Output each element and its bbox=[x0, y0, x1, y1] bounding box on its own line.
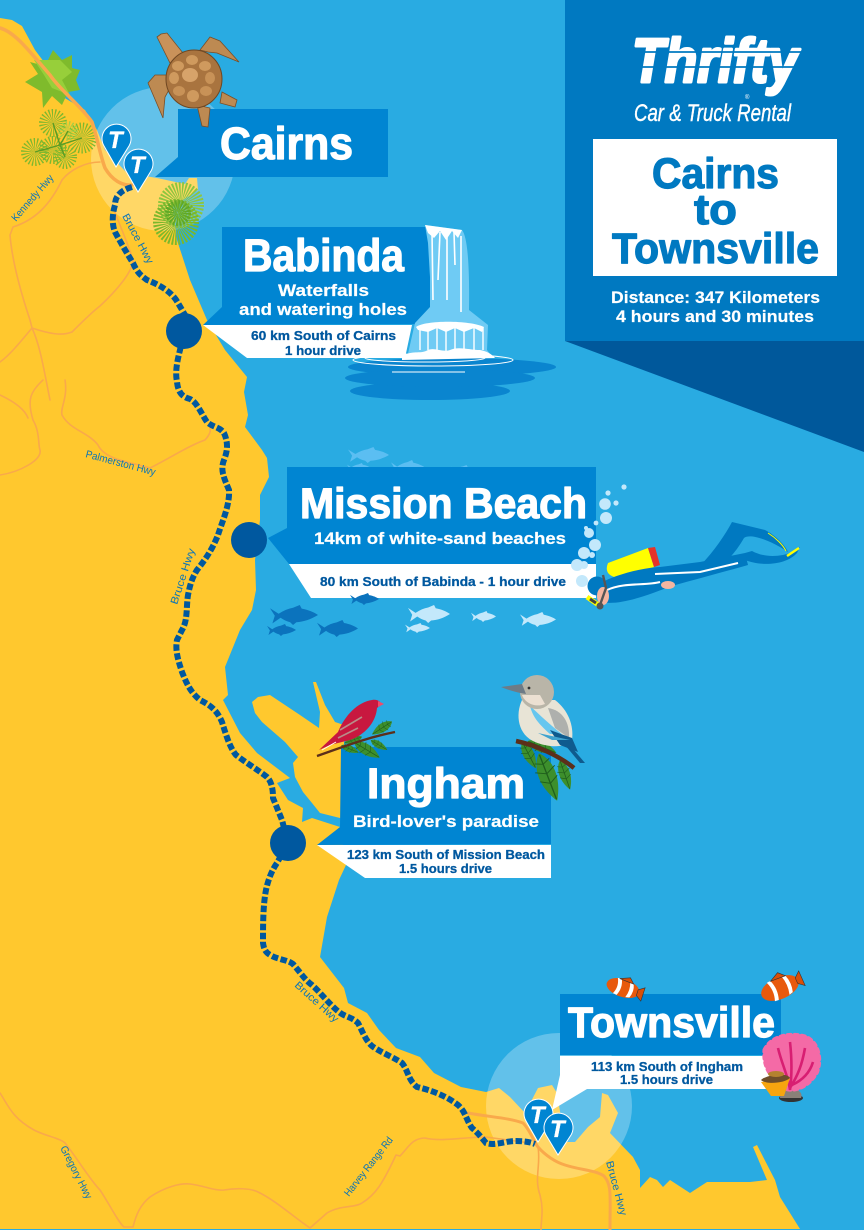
text: Babinda description bbox=[239, 282, 407, 319]
header panel: Thrifty bbox=[565, 0, 864, 452]
panel: Ingham label bbox=[317, 747, 551, 878]
icon: spiky green plant bbox=[163, 192, 194, 235]
title: Cairns to Townsville bbox=[612, 150, 819, 273]
fish school: dark blue bbox=[267, 593, 379, 637]
road label: Bruce Hwy north: Bruce Hwy bbox=[119, 212, 156, 267]
panel: Townsville label bbox=[552, 994, 781, 1110]
logo: Thrifty bbox=[625, 27, 805, 127]
title: Cairns to Townsville: to bbox=[694, 186, 737, 234]
icon: Townsville map pins: T bbox=[550, 1116, 567, 1143]
road label: Palmerston Hwy: Palmerston Hwy bbox=[84, 448, 158, 479]
roads bbox=[0, 28, 610, 1230]
illustration: clownfish left bbox=[604, 971, 647, 1003]
route stop: Ingham bbox=[270, 825, 306, 861]
highlight circle: Cairns bbox=[91, 87, 235, 231]
text: Ingham distance: 123 km South of Mission Beach bbox=[347, 847, 545, 862]
text: Babinda distance bbox=[251, 328, 396, 358]
fish school: pale blue bbox=[405, 605, 556, 633]
land: Ingham peninsula bbox=[252, 682, 344, 819]
callout: Babinda distance bbox=[203, 325, 412, 358]
illustration: clownfish right bbox=[756, 965, 806, 1006]
illustration: pink coral and anemone bbox=[761, 1035, 819, 1102]
text: Babinda distance: 1 hour drive bbox=[285, 343, 361, 358]
route stop: Mission Beach bbox=[231, 522, 267, 558]
heading: Townsville: Townsville bbox=[568, 999, 775, 1047]
text: Babinda distance: 60 km South of Cairns bbox=[251, 328, 396, 343]
route stop: Babinda bbox=[166, 313, 202, 349]
icon: Cairns map pins: T bbox=[130, 152, 147, 179]
panel: Mission Beach label bbox=[268, 467, 596, 598]
text: Babinda description: and watering holes bbox=[239, 301, 407, 319]
text: Mission Beach distance: 80 km South of Babinda - 1 hour drive bbox=[320, 574, 566, 589]
road label: Kennedy Hwy: Kennedy Hwy bbox=[9, 172, 57, 224]
road label: Bruce Hwy middle: Bruce Hwy bbox=[168, 546, 198, 606]
text: Townsville distance bbox=[591, 1059, 743, 1087]
route: Bruce Highway dashed line bbox=[113, 187, 535, 1144]
text: Townsville distance: 1.5 hours drive bbox=[620, 1072, 713, 1087]
icon: turtle bbox=[148, 33, 239, 127]
road label: Gregory Hwy: Gregory Hwy bbox=[57, 1144, 95, 1202]
heading: Babinda: Babinda bbox=[243, 230, 405, 281]
title: Cairns to Townsville: Townsville bbox=[612, 225, 819, 273]
panel: Cairns label bbox=[155, 109, 388, 177]
callout: Mission Beach distance bbox=[289, 564, 596, 598]
text: Ingham description: Bird-lover's paradise bbox=[353, 813, 539, 831]
icon: Cairns map pins: T bbox=[108, 127, 125, 154]
logo: Thrifty: Car & Truck Rental bbox=[634, 100, 792, 127]
icon: Cairns map pins bbox=[102, 124, 153, 192]
heading: Mission Beach: Mission Beach bbox=[300, 480, 587, 528]
text: Townsville distance: 113 km South of Ingham bbox=[591, 1059, 743, 1074]
road label: Bruce Hwy Townsville: Bruce Hwy bbox=[603, 1160, 629, 1218]
illustration: waterfall bbox=[345, 225, 556, 400]
icon: Townsville map pins bbox=[524, 1099, 573, 1155]
logo: Thrifty: ® bbox=[745, 94, 750, 101]
illustration: kookaburra on branch bbox=[501, 675, 585, 805]
panel: Babinda label bbox=[203, 227, 432, 358]
heading: Cairns: Cairns bbox=[220, 118, 353, 169]
callout: Ingham distance bbox=[317, 845, 551, 878]
logo: Thrifty: Thrifty bbox=[632, 27, 801, 96]
fish school: light blue bbox=[347, 447, 476, 475]
title box bbox=[593, 139, 837, 276]
text: distance and duration: 4 hours and 30 minutes bbox=[616, 307, 814, 326]
callout: Townsville distance bbox=[552, 1056, 781, 1110]
text: distance and duration: Distance: 347 Kilometers bbox=[611, 288, 820, 307]
text: distance and duration bbox=[611, 288, 820, 326]
icon: fan palms bbox=[28, 116, 90, 163]
illustration: scuba diver and bubbles bbox=[571, 484, 800, 610]
heading: Ingham: Ingham bbox=[367, 760, 525, 808]
icon: Townsville map pins: T bbox=[530, 1102, 547, 1129]
road label: Harvey Range Rd: Harvey Range Rd bbox=[342, 1135, 396, 1199]
text: Mission Beach description: 14km of white-sand beaches bbox=[314, 530, 566, 548]
text: Babinda description: Waterfalls bbox=[278, 282, 369, 300]
text: Ingham distance: 1.5 hours drive bbox=[399, 861, 492, 876]
title: Cairns to Townsville: Cairns bbox=[652, 150, 779, 198]
text: Ingham distance bbox=[347, 847, 545, 876]
icon: green palm bunch bbox=[25, 50, 80, 108]
road label: Bruce Hwy south: Bruce Hwy bbox=[292, 979, 341, 1026]
highlight circle: Townsville bbox=[486, 1033, 632, 1179]
illustration: red finch on branch bbox=[317, 700, 395, 763]
